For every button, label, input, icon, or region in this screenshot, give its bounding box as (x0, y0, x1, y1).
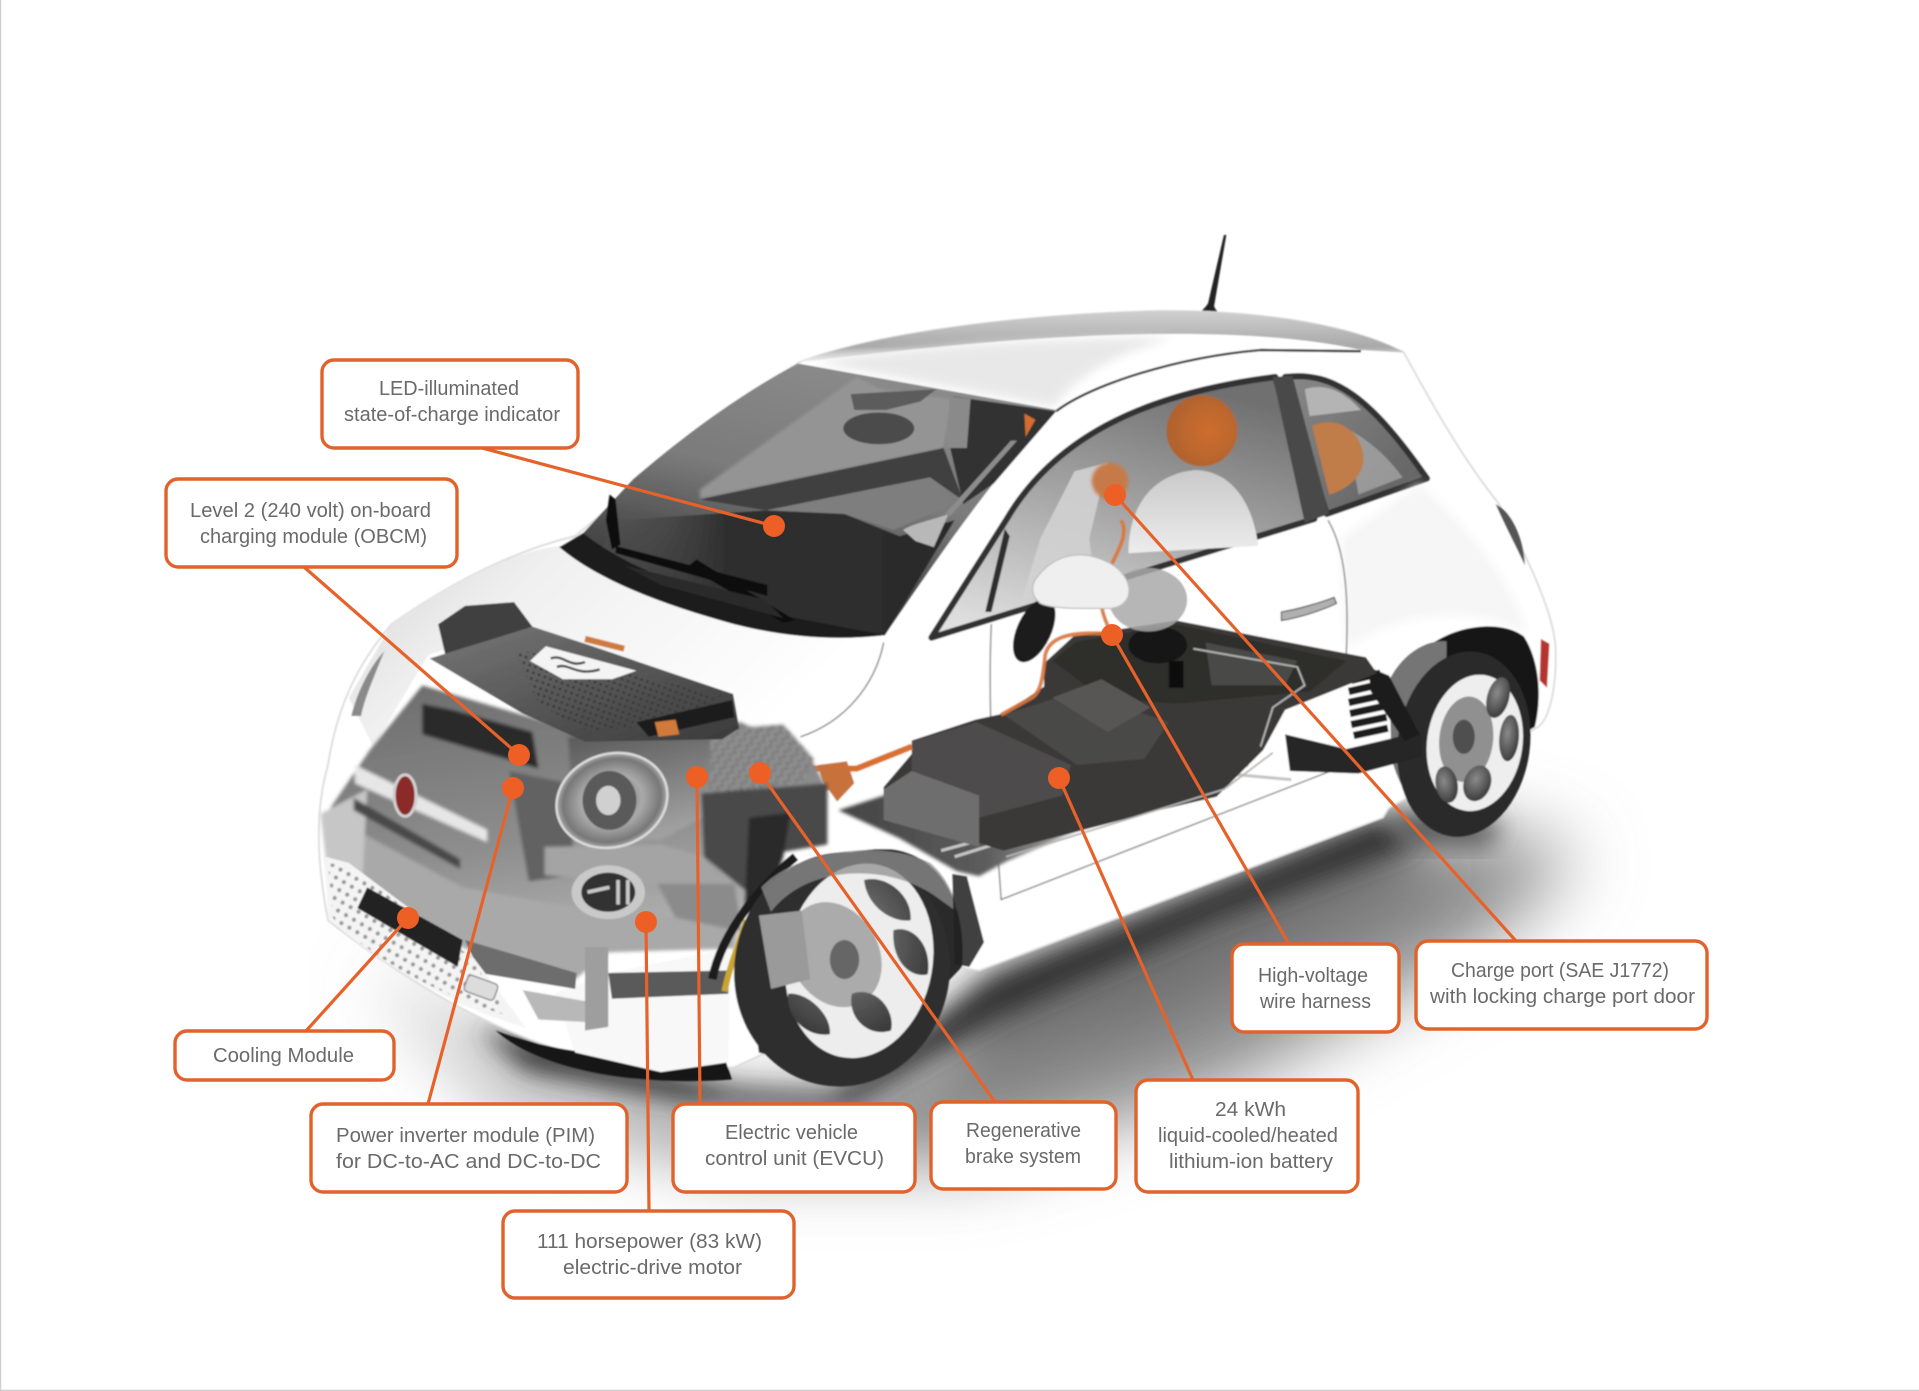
headlamp housing (568, 728, 710, 844)
dashboard (600, 510, 955, 635)
leader line (760, 773, 995, 1102)
label text: Charge port (SAE J1772) (1451, 960, 1669, 982)
hub (830, 940, 859, 979)
front headrest (1166, 395, 1237, 466)
label text: Power inverter module (PIM) (336, 1125, 595, 1147)
fog light (572, 865, 645, 919)
interior light panel (700, 377, 952, 499)
high voltage orange cable (1001, 520, 1124, 715)
translucent centre panel (545, 844, 722, 887)
car body (319, 311, 1556, 1072)
transmission (710, 725, 814, 796)
radiator column (509, 771, 575, 881)
coolant cap (1128, 627, 1187, 663)
battery upper tray (1053, 624, 1346, 704)
marker dot (397, 907, 419, 929)
rear wheel arch (1426, 626, 1539, 765)
tail light (1540, 639, 1549, 688)
engine cover (430, 602, 739, 742)
engine bay (321, 685, 827, 979)
roof edge line (1056, 350, 1361, 411)
window pillar (1273, 376, 1329, 523)
rear side marker (1496, 504, 1525, 565)
label text: High-voltage (1258, 965, 1368, 987)
leader line (1115, 495, 1516, 941)
rear glass vent (1305, 387, 1361, 416)
hood (349, 546, 884, 747)
coolant reservoir (438, 602, 532, 661)
rear spoke openings (1482, 675, 1514, 721)
coil spring (1349, 673, 1388, 736)
front tyre ghost top (761, 850, 957, 912)
orange top cable (585, 639, 624, 649)
battery top plate (1206, 643, 1297, 685)
front wheel (716, 835, 969, 1104)
marker dot (502, 777, 524, 799)
brake disc (769, 885, 900, 1024)
rear side window (1285, 376, 1427, 514)
marker dot (763, 515, 785, 537)
callout: regenerative brake system (749, 762, 1116, 1189)
leader line (304, 567, 519, 755)
front arch edge (952, 874, 984, 967)
orange connector (818, 761, 854, 802)
brake booster (1109, 568, 1187, 632)
label text: liquid-cooled/heated (1158, 1125, 1338, 1147)
label text: LED-illuminated (379, 378, 519, 400)
callout: electric-drive motor (503, 911, 794, 1298)
label box (931, 1102, 1116, 1189)
label text: for DC-to-AC and DC-to-DC (336, 1151, 601, 1173)
battery raised module (1053, 679, 1150, 732)
marker dot (1101, 624, 1123, 646)
front rim (770, 852, 948, 1070)
label box (673, 1104, 915, 1192)
label text: charging module (OBCM) (200, 526, 427, 548)
lower white bumper (554, 949, 731, 1072)
door seams (800, 520, 1347, 900)
rear wheel (1385, 641, 1542, 845)
door mirror stalk (1004, 592, 1064, 669)
car cutaway illustration (319, 235, 1579, 1163)
bumper lower mid shadow (465, 940, 576, 989)
seat edge strip (945, 441, 1017, 516)
cover badge (530, 646, 636, 679)
suspension tower (1368, 667, 1420, 742)
roof shading (814, 338, 1175, 406)
label text (1258, 965, 1371, 1013)
rear tread (1389, 641, 1447, 832)
label text (1429, 960, 1695, 1008)
leader line (306, 918, 408, 1031)
fog light bars (587, 880, 628, 904)
label box (175, 1031, 394, 1080)
orange cable to motor (789, 747, 912, 796)
marker dot (749, 762, 771, 784)
side front window (931, 377, 1314, 638)
label text: Electric vehicle (725, 1122, 858, 1144)
sun visor mount (851, 389, 936, 410)
label text (190, 500, 431, 548)
callout: on-board charging module (166, 479, 530, 766)
windshield (559, 363, 1056, 638)
front seat sliver (903, 514, 949, 547)
seat back (766, 477, 947, 530)
lower grille slit (354, 798, 460, 869)
underbody tunnel (838, 796, 1163, 876)
callout: power inverter module (311, 777, 627, 1192)
label text: electric-drive motor (563, 1257, 742, 1279)
marker dot (1048, 767, 1070, 789)
label text: 24 kWh (1215, 1099, 1286, 1121)
callout: lithium-ion battery (1048, 767, 1358, 1192)
dark hose (712, 857, 796, 979)
caliper (759, 911, 810, 989)
subframe (701, 783, 827, 893)
label text: wire harness (1259, 991, 1371, 1013)
radiator slats (523, 990, 585, 1022)
marker dot (635, 911, 657, 933)
callout: electric vehicle control unit (673, 766, 915, 1192)
bumper underside (496, 1031, 732, 1081)
wipers (606, 494, 796, 623)
label text: with locking charge port door (1429, 986, 1695, 1008)
leader line (697, 777, 700, 1104)
callout: charge port (1104, 484, 1707, 1029)
fog light lens (581, 873, 635, 912)
rear glass light panel (1346, 428, 1403, 494)
perforated lower grille (326, 857, 526, 1028)
spoke openings (788, 879, 928, 1035)
label box (322, 360, 578, 448)
steering knuckle (657, 884, 742, 936)
front tyre (716, 835, 969, 1104)
marker dot (1104, 484, 1126, 506)
cover front lip (636, 700, 734, 737)
front wheel arch (747, 849, 963, 1077)
callout: cooling module (175, 907, 419, 1080)
rear tyre (1385, 643, 1542, 845)
rear suspension arm (1285, 732, 1422, 774)
interior vertical bar (946, 397, 971, 448)
yellow coolant hose (725, 920, 747, 991)
front fender reflection (351, 651, 384, 716)
charge port glow (1092, 463, 1128, 499)
cover texture (514, 649, 722, 732)
leader line (646, 922, 649, 1211)
leader line (1059, 778, 1193, 1080)
label box (1232, 944, 1399, 1032)
interior dark right side (949, 397, 1056, 504)
label text (336, 1125, 601, 1173)
sill rail lines (941, 765, 1291, 857)
fiat grille badge (394, 775, 416, 816)
rear body shading (1340, 483, 1527, 649)
door handle (1281, 597, 1336, 621)
marker dot (508, 744, 530, 766)
rail lines (1006, 649, 1305, 857)
cowl (559, 534, 885, 638)
label box (1136, 1080, 1358, 1192)
callout: LED state-of-charge indicator (322, 360, 785, 537)
marker dot (686, 766, 708, 788)
bumper band (349, 826, 734, 979)
radiator post (585, 947, 608, 1031)
leader line (428, 788, 513, 1104)
label text (965, 1120, 1081, 1168)
rear hub (1453, 720, 1475, 754)
front seat (1128, 470, 1258, 553)
rear headrest (1312, 422, 1363, 494)
rear view mirror (843, 412, 914, 444)
label text (1158, 1099, 1338, 1173)
interior dark wedge (700, 448, 963, 510)
driver seat side (1022, 463, 1108, 600)
bumper corner dark band (608, 971, 729, 999)
label box (503, 1211, 794, 1298)
label text: state-of-charge indicator (344, 404, 560, 426)
grille perforations (328, 863, 508, 1016)
rear disc (1435, 694, 1497, 785)
headlight (544, 739, 680, 862)
fiat 500 badge (463, 974, 499, 1001)
label text: Cooling Module (213, 1045, 354, 1067)
lower air intake (357, 887, 463, 967)
label text (705, 1122, 884, 1170)
battery side duct (884, 771, 979, 847)
dark engine internals (422, 704, 539, 769)
cover body (430, 627, 739, 742)
lamp centre (596, 786, 621, 815)
battery mid block (1004, 692, 1169, 765)
label box (1416, 941, 1707, 1029)
rear rim (1418, 668, 1532, 817)
label text: Regenerative (966, 1120, 1081, 1142)
wiper well (624, 565, 783, 618)
ground shadow (367, 808, 1579, 1163)
fascia (330, 685, 827, 979)
left fascia highlight (321, 789, 367, 900)
label text: control unit (EVCU) (705, 1148, 884, 1170)
label text (344, 378, 560, 426)
antenna (1197, 235, 1226, 316)
callout: high-voltage wire harness (1101, 624, 1399, 1032)
label text: brake system (965, 1146, 1081, 1168)
headlight bowl (583, 771, 636, 830)
roof panel (799, 311, 1404, 362)
label text: 111 horsepower (83 kW) (537, 1231, 762, 1253)
label text (537, 1231, 762, 1279)
sticker (1024, 414, 1035, 437)
label text: lithium-ion battery (1169, 1151, 1333, 1173)
leader line (1112, 635, 1289, 944)
upper grille bar (355, 765, 487, 842)
door mirror (1033, 555, 1129, 608)
suspension leg (744, 813, 791, 912)
battery pack (884, 621, 1377, 857)
label box (166, 479, 457, 567)
label box (311, 1104, 627, 1192)
battery front block (912, 722, 1071, 818)
badge mark (551, 657, 600, 672)
orange motor part (655, 720, 679, 737)
cap neck (1169, 661, 1184, 688)
quarter glass post (985, 529, 1010, 612)
leader line (482, 448, 774, 526)
label text: Level 2 (240 volt) on-board (190, 500, 431, 522)
